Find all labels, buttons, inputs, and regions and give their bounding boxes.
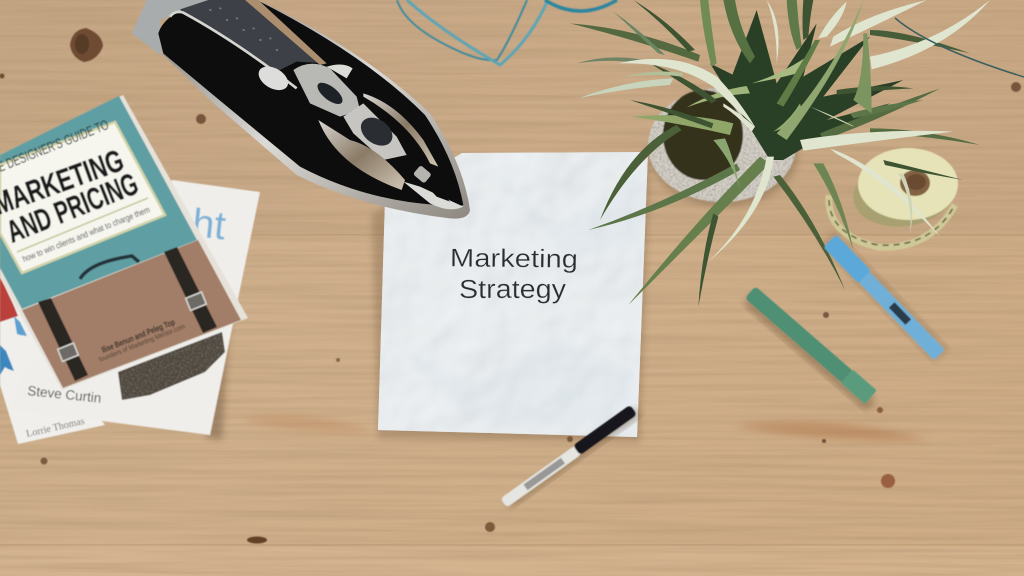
iron handle	[180, 0, 327, 72]
book: The Designer's Guide to Marketing and Pricing: Ilise Benun and Peleg Top	[100, 317, 176, 355]
book: The Designer's Guide to Marketing and Pricing: E DESIGNER'S GUIDE TO	[0, 116, 111, 175]
blue highlighter	[820, 230, 949, 363]
back book with figures: Lorrie Thomas	[25, 416, 86, 440]
green marker	[741, 285, 881, 412]
white book: Steve Curtin	[10, 180, 260, 440]
paper heading: Marketing	[450, 244, 578, 274]
black marker	[500, 403, 642, 511]
thin string at upper right	[895, 18, 1024, 77]
tape roll	[829, 148, 962, 247]
white book: Steve Curtin: Steve Curtin	[27, 383, 102, 406]
book: The Designer's Guide to Marketing and Pricing: how to win clients and what to charge them	[21, 204, 151, 264]
ribbon	[397, 0, 617, 65]
plant leaves	[570, 0, 990, 307]
white book: Steve Curtin: ht	[190, 201, 228, 248]
book: The Designer's Guide to Marketing and Pricing	[0, 95, 248, 390]
briefcase straps and handle	[38, 298, 88, 381]
book: The Designer's Guide to Marketing and Pricing: founders of Marketing Mentor.com	[98, 323, 186, 364]
back book with figures	[0, 276, 105, 444]
paper heading	[450, 244, 578, 304]
paper heading: Strategy	[459, 276, 566, 304]
book: The Designer's Guide to Marketing and Pricing: AND PRICING	[2, 166, 143, 250]
ceramic plant pot	[648, 88, 798, 207]
book title label	[0, 122, 165, 273]
dark leaf core	[710, 10, 903, 160]
crumpled paper	[372, 152, 650, 442]
clothes iron	[132, 0, 470, 219]
